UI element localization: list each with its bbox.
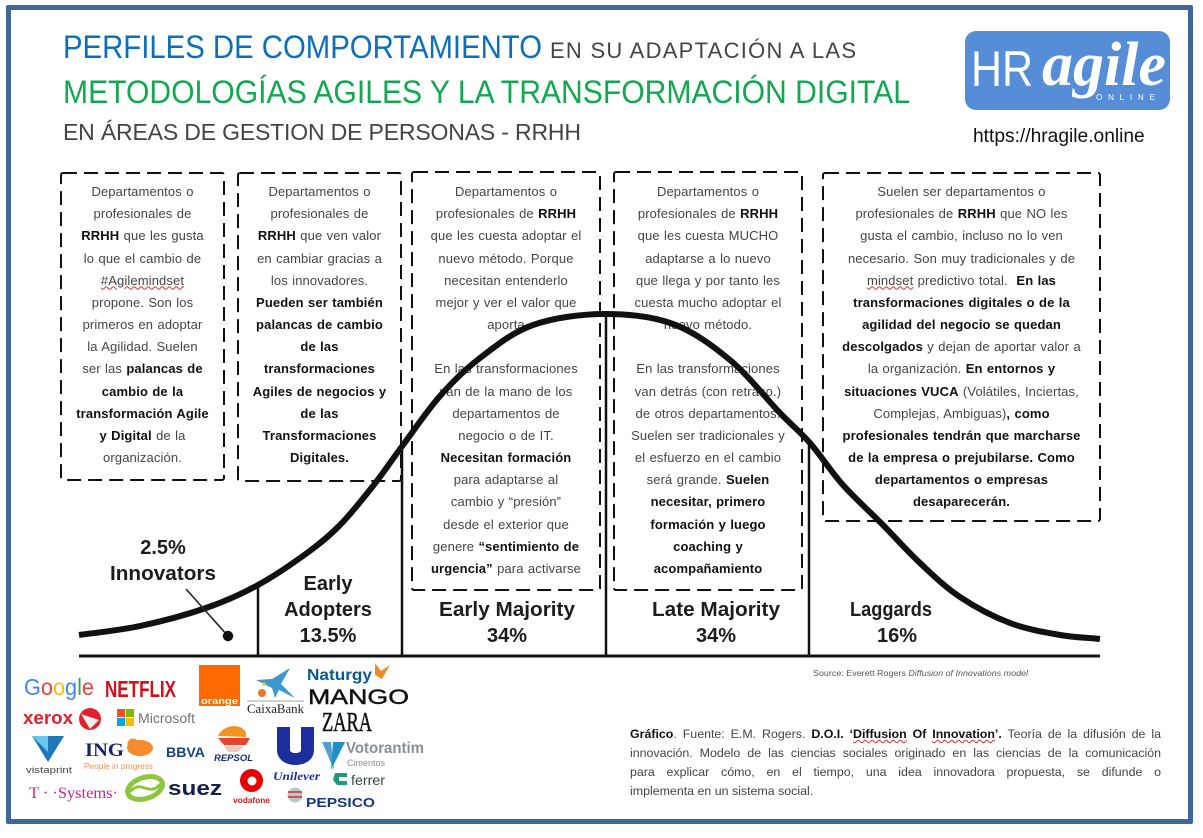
panel: laggards text: agilidad del negocio se quedan: [862, 317, 1061, 332]
logo: HRagile: agile: [1042, 31, 1166, 99]
panel: late majority text: Departamentos o: [657, 184, 759, 199]
title: [63, 29, 910, 145]
panel: early majority text: genere “sentimiento de: [433, 539, 579, 554]
panel: early majority text: negocio o de IT.: [458, 428, 554, 443]
panel: innovators text: primeros en adoptar: [83, 317, 202, 332]
panel: early majority text: cambio y “presión”: [451, 494, 561, 509]
logo: Xerox: [23, 708, 101, 730]
panel: early adopters text: [237, 172, 402, 482]
panel: innovators text: #Agilemindset: [101, 273, 184, 288]
panel: early adopters text: profesionales de: [271, 206, 368, 221]
panel: early adopters text: RRHH que ven valor: [258, 228, 381, 243]
logo: Repsol: REPSOL: [214, 753, 253, 764]
company logos: [23, 663, 424, 810]
panel: innovators text: ser las palancas de: [82, 361, 203, 376]
label: early majority: Early Majority: [439, 599, 576, 621]
panel: late majority text: cuesta mucho adoptar el: [635, 295, 781, 310]
panel: late majority text: el esfuerzo en el cambio: [635, 450, 781, 465]
panel: late majority text: Suelen ser tradicionales y: [631, 428, 785, 443]
panel: late majority text: adaptarse a lo nuevo: [645, 251, 771, 266]
logo: Votorantim: Votorantim: [346, 740, 424, 757]
panel: early majority text: van de la mano de los: [440, 384, 572, 399]
logo: Suez: suez: [168, 778, 222, 800]
logo: Naturgy: Naturgy: [307, 667, 372, 684]
panel: laggards text: descolgados y dejan de aportar valor a: [842, 339, 1081, 354]
logo: CaixaBank: [247, 668, 304, 716]
panel: early adopters text: de las: [300, 339, 339, 354]
logo: Orange: [199, 665, 240, 707]
logo: Vodafone: [233, 769, 270, 805]
panel: early majority text: mejor y ver el valor que: [436, 295, 576, 310]
label: laggards: 16%: [877, 625, 917, 647]
panel: laggards text: de la empresa o prejubilarse. Como: [848, 450, 1075, 465]
panel: late majority text: En las transformaciones: [636, 361, 780, 376]
label: early adopters: 13.5%: [300, 625, 357, 647]
label: laggards: Laggards: [850, 599, 932, 621]
panel: early majority text: urgencia” para activarse: [431, 561, 581, 576]
panel: early adopters text: de las: [300, 406, 339, 421]
logo: Ferrer: ferrer: [351, 772, 385, 788]
panel: early adopters text: los innovadores.: [271, 273, 368, 288]
label: early adopters: [284, 573, 372, 647]
panel: early majority text: Departamentos o: [455, 184, 557, 199]
panel: early majority text: aporta: [487, 317, 525, 332]
panel: early adopters text: palancas de cambio: [256, 317, 383, 332]
source note: Gráfico. Fuente: E.M. Rogers. D.O.I. ‘Diffusion Of Innovation’. Teoría de la difusión de la: [630, 727, 1161, 741]
logo: PepsiCo: PEPSICO: [306, 796, 375, 810]
panel: innovators text: profesionales de: [94, 206, 191, 221]
panel: early majority text: que les cuesta adoptar el: [431, 228, 581, 243]
logo: PepsiCo: [288, 788, 375, 810]
panel: early adopters text: Agiles de negocios y: [253, 384, 386, 399]
bell curve: [79, 314, 1100, 639]
panel: early majority text: nuevo método. Porque: [438, 251, 574, 266]
panel: early majority text: desde el exterior que: [443, 517, 569, 532]
logo: HRagile: HR: [971, 41, 1033, 97]
panel: laggards text: mindset predictivo total. En las: [867, 273, 1056, 288]
chart source: Source: Everett Rogers Diffusion of Innovations model: [813, 668, 1029, 678]
panel: early adopters text: Digitales.: [290, 450, 349, 465]
panel: innovators text: la Agilidad. Suelen: [87, 339, 198, 354]
logo: Unilever: [273, 727, 321, 783]
logo: Repsol: [214, 726, 253, 764]
panel: early adopters text: transformaciones: [264, 361, 375, 376]
panel: late majority text: coaching y: [673, 539, 743, 554]
logo: Zara: ZARA: [322, 707, 372, 737]
panel: early majority text: para adaptarse al: [454, 472, 558, 487]
logo: Votorantim: Cimentos: [347, 758, 385, 769]
source note: innovación. Modelo de las ciencias sociales originado en las ciencias de la comunicación: [630, 746, 1161, 760]
panel: laggards text: [822, 172, 1101, 522]
title: EN SU ADAPTACIÓN A LAS: [550, 38, 856, 63]
panel: innovators text: organización.: [103, 450, 182, 465]
panel: laggards text: profesionales tendrán que marcharse: [843, 428, 1080, 443]
logo: ING: [84, 738, 153, 771]
panel: late majority text: de otros departamentos.: [636, 406, 780, 421]
panel: innovators text: lo que el cambio de: [84, 251, 201, 266]
panel: innovators text: [60, 172, 225, 481]
label: early adopters: Adopters: [284, 599, 372, 621]
label: early adopters: Early: [304, 573, 353, 595]
logo: Microsoft: Microsoft: [138, 711, 195, 726]
panel: innovators text: Departamentos o: [91, 184, 194, 199]
panel: innovators text: cambio de la: [102, 384, 183, 399]
panel: laggards text: Suelen ser departamentos o: [877, 184, 1046, 199]
innovators pointer: [186, 589, 233, 641]
panel: innovators text: y Digital de la: [100, 428, 185, 443]
panel: laggards text: situaciones VUCA (Volátiles, Inciertas,: [844, 384, 1079, 399]
source note: para explicar cómo, en el tiempo, una idea innovadora propuesta, se difunde o: [630, 765, 1161, 779]
panel: early majority text: departamentos de: [452, 406, 560, 421]
logo: Microsoft: [117, 709, 195, 726]
source note: implementa en un sistema social.: [630, 784, 813, 798]
panel: laggards text: profesionales de RRHH que NO les: [855, 206, 1068, 221]
logo: T-Systems: T · ·Systems·: [29, 785, 118, 802]
panel: laggards text: la organización. En entornos y: [868, 361, 1055, 376]
title: EN ÁREAS DE GESTION DE PERSONAS - RRHH: [63, 119, 581, 145]
panel: early majority text: Necesitan formación: [441, 450, 571, 465]
source note: [630, 727, 1161, 798]
logo: Google: Google: [24, 674, 94, 700]
logo: ING: ING: [85, 740, 124, 761]
panel: late majority text: que llega y por tanto les: [636, 273, 780, 288]
label: innovators: [110, 537, 216, 585]
logo: Vistaprint: [26, 736, 72, 776]
logo: Netflix: NETFLIX: [105, 676, 176, 702]
logo: HRagile: ONLINE: [1096, 93, 1155, 102]
label: late majority: 34%: [696, 625, 736, 647]
panel: laggards text: desaparecerán.: [913, 494, 1010, 509]
panel: early adopters text: Transformaciones: [263, 428, 376, 443]
panel: late majority text: profesionales de RRHH: [638, 206, 778, 221]
panel: laggards text: Complejas, Ambiguas), como: [873, 406, 1050, 421]
logo: Vodafone: vodafone: [233, 795, 270, 805]
label: early majority: [439, 599, 576, 647]
label: late majority: [652, 599, 781, 647]
panel: late majority text: [613, 171, 803, 591]
panel: late majority text: necesitar, primero: [651, 494, 765, 509]
panel: early adopters text: Departamentos o: [268, 184, 371, 199]
panel: late majority text: formación y luego: [650, 517, 766, 532]
label: innovators: Innovators: [110, 563, 216, 585]
panel: early majority text: profesionales de RRHH: [436, 206, 576, 221]
panel: early majority text: En las transformaciones: [434, 361, 578, 376]
baseline and dividers: [79, 314, 1100, 656]
label: early majority: 34%: [487, 625, 527, 647]
logo: ING: People in progress: [84, 761, 153, 771]
panel: late majority text: acompañamiento: [654, 561, 762, 576]
website url: https://hragile.online: [973, 126, 1145, 147]
panel: early adopters text: en cambiar gracias a: [257, 251, 382, 266]
logo: HRagile: [965, 31, 1170, 110]
logo: Ferrer: [333, 772, 385, 788]
panel: early adopters text: Pueden ser también: [256, 295, 383, 310]
label: late majority: Late Majority: [652, 599, 781, 621]
label: laggards: [850, 599, 932, 647]
title: PERFILES DE COMPORTAMIENTO: [63, 29, 542, 65]
logo: Mango: MANGO: [308, 686, 409, 709]
logo: Naturgy: [307, 663, 390, 684]
panel: early majority text: necesitan entenderlo: [444, 273, 568, 288]
panel: innovators text: transformación Agile: [76, 406, 209, 421]
panel: late majority text: van detrás (con retraso.): [635, 384, 781, 399]
panel: laggards text: transformaciones digitales o de la: [853, 295, 1070, 310]
panel: innovators text: RRHH que les gusta: [81, 228, 204, 243]
logo: CaixaBank: CaixaBank: [247, 701, 304, 716]
logo: Vistaprint: vistaprint: [26, 765, 72, 776]
logo: Xerox: xerox: [23, 708, 73, 728]
panel: late majority text: que les cuesta MUCHO: [638, 228, 778, 243]
logo: BBVA: BBVA: [166, 745, 205, 760]
logo: Unilever: Unilever: [273, 771, 321, 783]
label: innovators: 2.5%: [140, 537, 186, 559]
panel: late majority text: nuevo método.: [664, 317, 752, 332]
logo: Suez: [125, 772, 222, 804]
logo: Votorantim: [322, 740, 424, 770]
logo: Orange: orange: [201, 696, 238, 707]
panel: laggards text: necesario. Son muy tradicionales y de: [848, 251, 1075, 266]
panel: early majority text: [411, 171, 601, 591]
panel: laggards text: departamentos o empresas: [875, 472, 1048, 487]
panel: laggards text: gusta el cambio, incluso no lo ven: [860, 228, 1063, 243]
panel: late majority text: será grande. Suelen: [647, 472, 769, 487]
panel: innovators text: propone. Son los: [92, 295, 193, 310]
